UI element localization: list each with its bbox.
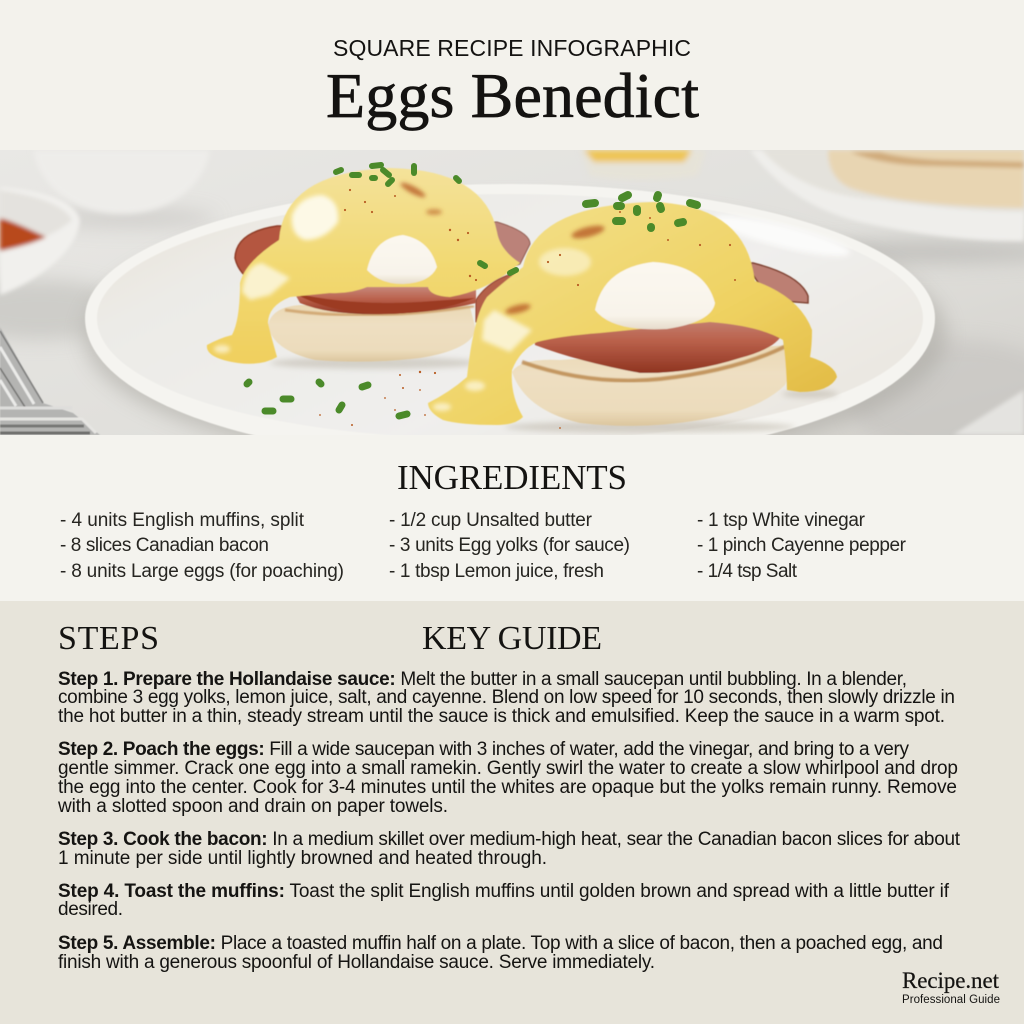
ingredients column 3 (697, 510, 907, 582)
steps panel (0, 601, 1024, 1024)
step 1 (58, 669, 955, 727)
ingredients column 1 (60, 510, 344, 582)
white bowl (33, 150, 210, 214)
step 1: the hot butter in a thin, steady stream until the sauce is thick and emulsified. Keep the sauce in a warm spot. (58, 706, 945, 727)
step 5: finish with a generous spoonful of Hollandaise sauce. Serve immediately. (58, 952, 655, 973)
muffin toasted edge (285, 306, 474, 315)
subtitle: SQUARE RECIPE INFOGRAPHIC (333, 35, 691, 61)
right egg stack (428, 202, 837, 426)
back bacon left (476, 272, 520, 330)
step 4: desired. (58, 899, 123, 920)
muffin (268, 305, 476, 362)
step 2 (57, 739, 958, 817)
chives on right egg (586, 195, 697, 228)
stack shadows (270, 357, 838, 433)
key guide heading: KEY GUIDE (422, 620, 602, 657)
plate shadow (83, 200, 947, 470)
chives on plate (247, 382, 407, 416)
ingredients column 1: - 8 units Large eggs (for poaching) (60, 561, 344, 582)
bacon band (530, 310, 783, 373)
muffin (512, 345, 792, 426)
tablecloth (0, 150, 1024, 435)
ingredients column 1: - 8 slices Canadian bacon (60, 535, 269, 556)
ingredients heading: INGREDIENTS (397, 458, 627, 497)
side plate with muffins (750, 150, 1024, 241)
ingredients column 2 (389, 510, 630, 582)
step 2: Step 2. Poach the eggs: Fill a wide saucepan with 3 inches of water, add the vinegar, and bring to a very (58, 739, 910, 760)
bacon dark edge (294, 293, 475, 314)
step 2: gentle simmer. Crack one egg into a small ramekin. Gently swirl the water to create a slow whirlpool and drop (58, 758, 958, 779)
step 2: the egg into the center. Cook for 3-4 minutes until the whites are opaque but the yolks remain runny. Remove (58, 777, 957, 798)
hollandaise (207, 168, 520, 364)
brand mark (902, 968, 1000, 1006)
chives on left egg (336, 165, 516, 273)
step 5: Step 5. Assemble: Place a toasted muffin half on a plate. Top with a slice of bacon, then a poached egg, and (58, 933, 943, 954)
cloth fold (953, 390, 1024, 435)
step 5 (58, 933, 943, 973)
hollandaise (428, 202, 837, 425)
step 4 (58, 881, 950, 920)
sauce highlights (214, 195, 338, 353)
back bacon right (480, 222, 530, 280)
left egg stack (207, 168, 530, 364)
brand mark: Recipe.net (902, 968, 1000, 993)
ingredients column 2: - 1 tbsp Lemon juice, fresh (389, 561, 604, 582)
ingredients column 3: - 1/4 tsp Salt (697, 561, 798, 582)
ingredients column 2: - 1/2 cup Unsalted butter (389, 510, 593, 531)
steps heading: STEPS (58, 620, 159, 657)
step 1: Step 1. Prepare the Hollandaise sauce: Melt the butter in a small saucepan until bubbling. In a blender, (58, 669, 907, 690)
back bacon right (745, 263, 808, 303)
hero photo: eggs benedict on a plate (0, 150, 1024, 435)
spice bowl (0, 187, 80, 295)
juice glass (580, 150, 706, 180)
poached egg (595, 262, 715, 329)
ingredients column 3: - 1 pinch Cayenne pepper (697, 535, 907, 556)
step 3: 1 minute per side until lightly browned and heated through. (58, 848, 547, 869)
back bacon left (235, 226, 300, 290)
title: Eggs Benedict (326, 60, 699, 131)
ingredients column 2: - 3 units Egg yolks (for sauce) (389, 535, 630, 556)
ingredients panel (60, 458, 907, 582)
paprika blotches (399, 180, 606, 316)
paprika specks (319, 189, 736, 429)
bacon band (290, 285, 476, 314)
poached egg (367, 235, 437, 284)
step 1: combine 3 egg yolks, lemon juice, salt, and cayenne. Blend on low speed for 10 seconds, then slowly drizzle in (58, 687, 955, 708)
fork (0, 327, 100, 435)
ingredients column 3: - 1 tsp White vinegar (697, 510, 866, 531)
step 2: with a slotted spoon and drain on paper towels. (57, 796, 448, 817)
muffin toasted edge (522, 344, 790, 381)
step 3: Step 3. Cook the bacon: In a medium skillet over medium-high heat, sear the Canadian bacon slices for about (58, 829, 961, 850)
sauce highlights (433, 248, 591, 411)
step 4: Step 4. Toast the muffins: Toast the split English muffins until golden brown and spread with a little butter if (58, 881, 950, 902)
ingredients column 1: - 4 units English muffins, split (60, 510, 305, 531)
brand mark: Professional Guide (902, 994, 1000, 1006)
header panel (326, 35, 699, 131)
step 3 (58, 829, 961, 869)
plate (85, 184, 935, 462)
cloth shadows (0, 208, 1024, 460)
